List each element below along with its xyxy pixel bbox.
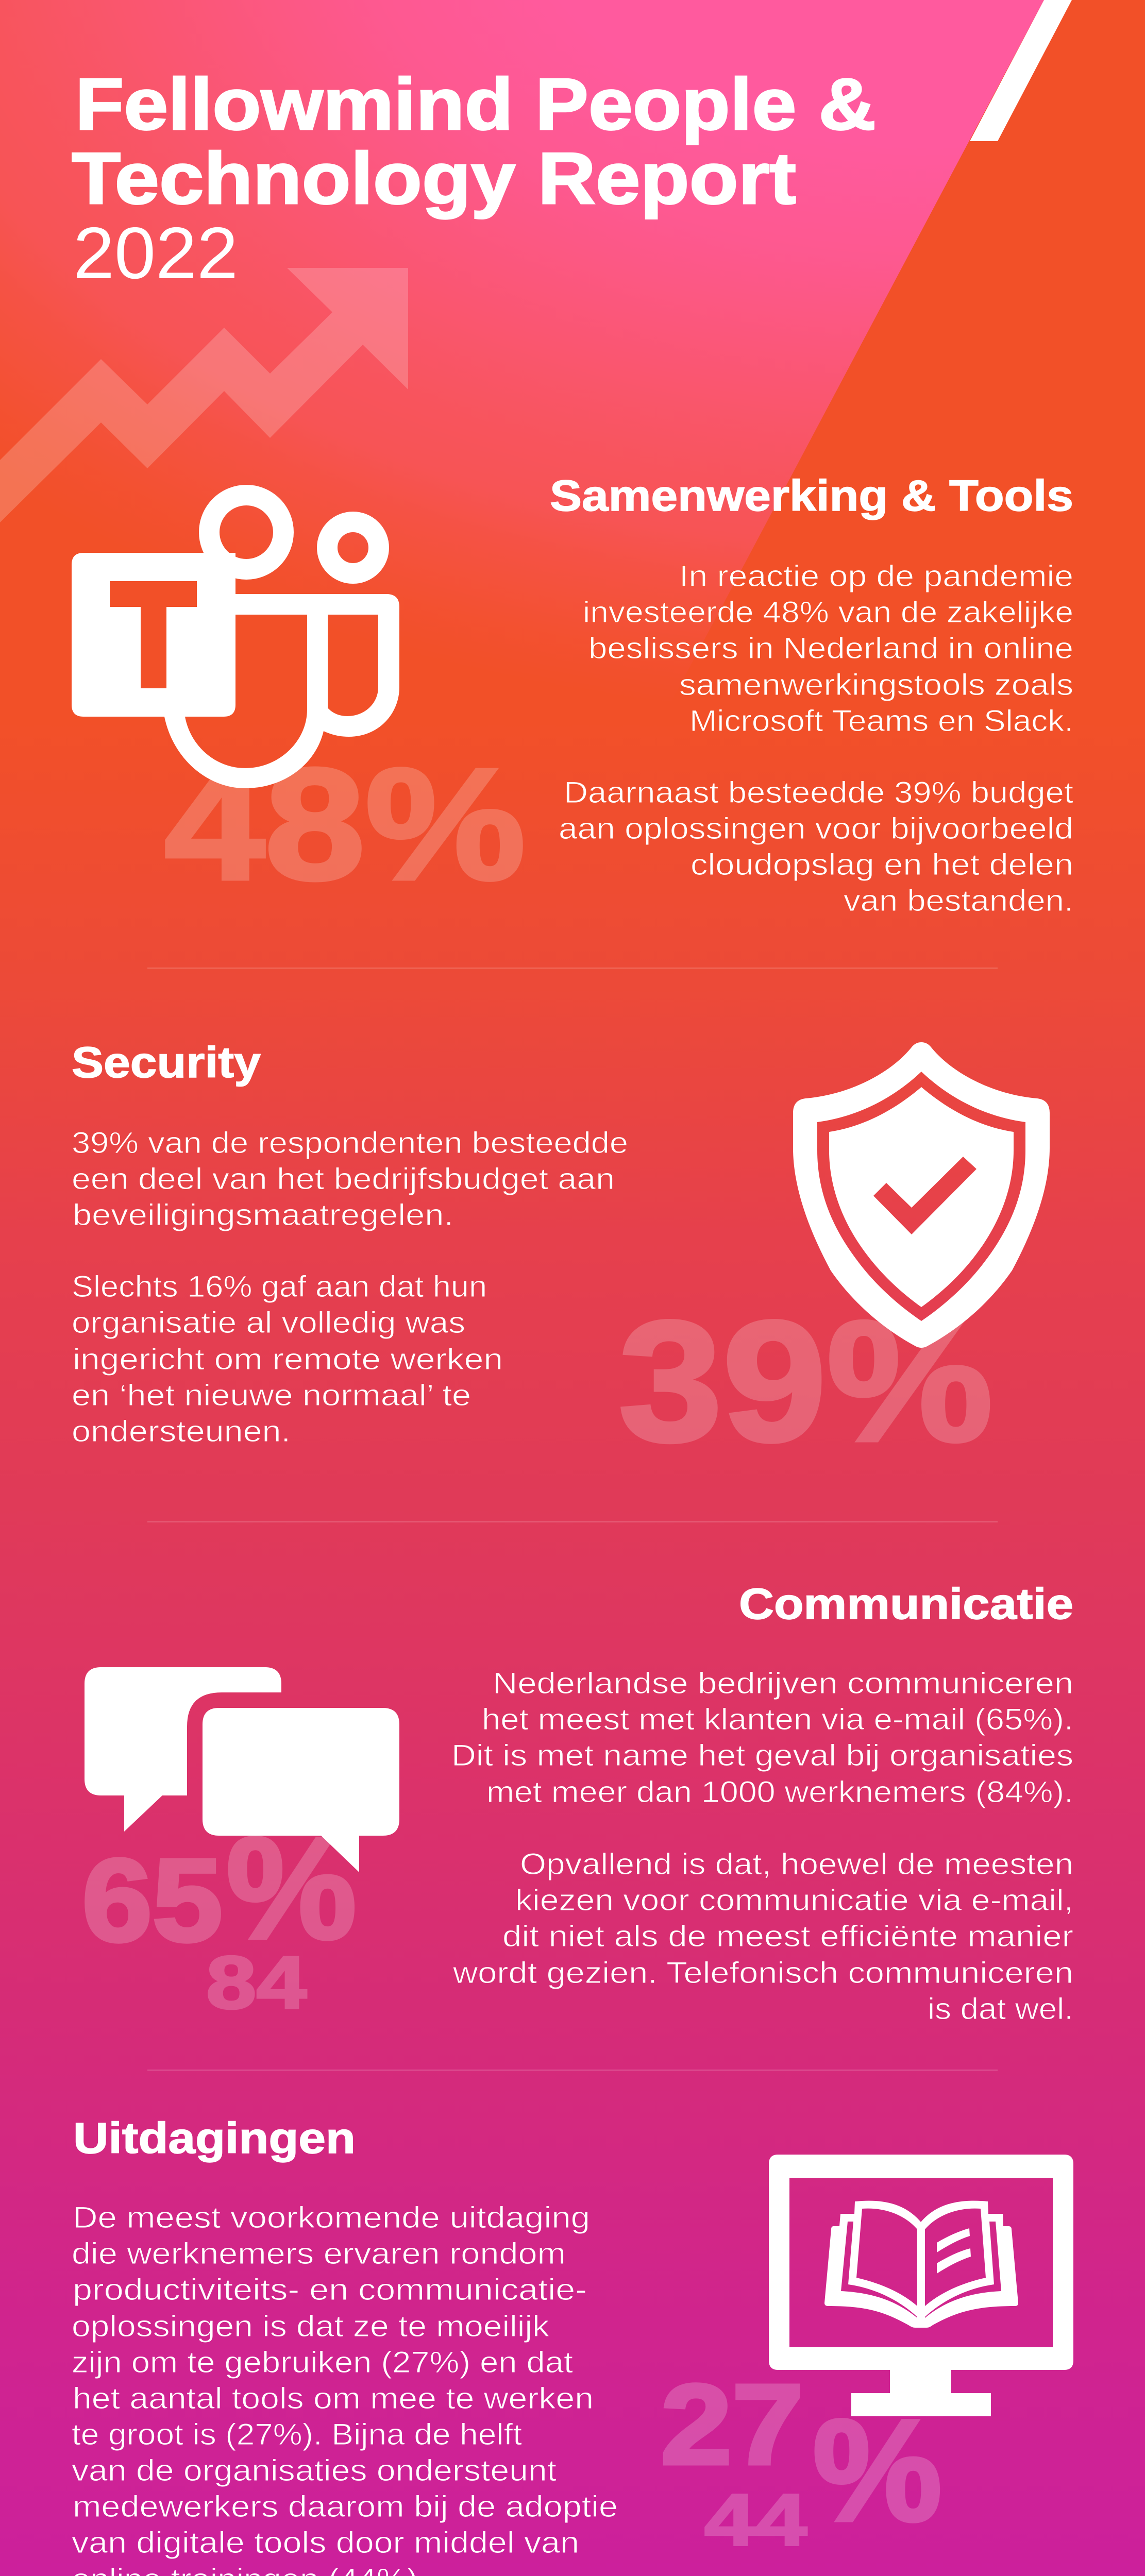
icon: shield with check: [793, 1042, 1050, 1348]
body text: ingericht om remote werken: [73, 1343, 503, 1376]
body text: van de organisaties ondersteunt: [72, 2454, 557, 2487]
body text: aan oplossingen voor bijvoorbeeld: [559, 812, 1073, 845]
body text: van digitale tools door middel van: [72, 2526, 579, 2560]
body text: een deel van het bedrijfsbudget aan: [72, 1162, 615, 1196]
heading: Communicatie: [739, 1580, 1073, 1628]
stat: 65%: 65: [82, 1835, 223, 1966]
stat: 65%: [82, 1807, 357, 1969]
body text: In reactie op de pandemie: [679, 560, 1073, 593]
body text: kiezen voor communicatie via e-mail,: [515, 1884, 1073, 1917]
body text: beveiligingsmaatregelen.: [73, 1198, 453, 1232]
stat: 48%: 48%: [164, 736, 526, 913]
heading: Security: [72, 1038, 261, 1087]
white diagonal stripe: [970, 0, 1072, 141]
icon: rising arrow: [0, 268, 408, 522]
body text: Daarnaast besteedde 39% budget: [564, 776, 1073, 809]
heading: Uitdagingen: [73, 2114, 356, 2162]
body text: medewerkers daarom bij de adoptie: [73, 2490, 618, 2523]
icon: speech bubbles: [85, 1667, 399, 1872]
body text: Microsoft Teams en Slack.: [689, 704, 1073, 738]
icon: Teams logo: [72, 495, 399, 788]
body text: het aantal tools om mee te werken: [73, 2382, 594, 2415]
body text: Slechts 16% gaf aan dat hun: [72, 1270, 487, 1303]
heading: Samenwerking & Tools: [550, 471, 1073, 520]
body text: [451, 1667, 1073, 2026]
panel: Samenwerking & Tools: [72, 471, 1073, 918]
panel: Security: [72, 1038, 1050, 1477]
body text: beslissers in Nederland in online: [588, 632, 1073, 665]
stat: 44: 44: [704, 2479, 807, 2561]
pink header wedge: [0, 0, 1044, 899]
title: [72, 63, 876, 294]
title: 2022: [73, 212, 238, 294]
stat: 27%: 27: [661, 2361, 803, 2488]
body text: te groot is (27%). Bijna de helft: [72, 2418, 522, 2451]
body text: wordt gezien. Telefonisch communiceren: [452, 1956, 1073, 1990]
body text: organisatie al volledig was: [72, 1306, 465, 1340]
body text: Dit is met name het geval bij organisaties: [451, 1739, 1073, 1772]
body text: en ‘het nieuwe normaal’ te: [72, 1379, 471, 1412]
body text: Nederlandse bedrijven communiceren: [493, 1667, 1073, 1700]
body text: met meer dan 1000 werknemers (84%).: [486, 1775, 1073, 1809]
body text: [559, 560, 1073, 918]
body text: die werknemers ervaren rondom: [72, 2237, 566, 2270]
panel: Communicatie: [82, 1580, 1073, 2026]
body text: Opvallend is dat, hoewel de meesten: [520, 1848, 1073, 1881]
body text: productiviteits- en communicatie-: [73, 2273, 587, 2307]
stat: 27%: %: [813, 2389, 942, 2551]
stat: 65%: %: [226, 1807, 357, 1969]
body text: dit niet als de meest efficiënte manier: [502, 1920, 1073, 1953]
panel: Uitdagingen: [72, 2114, 1073, 2576]
stat: 84: 84: [206, 1941, 307, 2024]
body text: het meest met klanten via e-mail (65%).: [482, 1703, 1073, 1736]
icon: monitor with book: [769, 2155, 1073, 2416]
title: Fellowmind People &: [75, 63, 876, 145]
body text: cloudopslag en het delen: [691, 848, 1073, 882]
body text: 39% van de respondenten besteedde: [72, 1126, 628, 1160]
body text: ondersteunen.: [72, 1415, 291, 1448]
body text: De meest voorkomende uitdaging: [73, 2201, 590, 2234]
body text: oplossingen is dat ze te moeilijk: [72, 2310, 550, 2343]
stat: 39%: 39%: [618, 1285, 993, 1477]
body text: [72, 1126, 628, 1448]
body text: investeerde 48% van de zakelijke: [583, 596, 1073, 629]
body text: is dat wel.: [928, 1992, 1073, 2026]
body text: samenwerkingstools zoals: [679, 668, 1073, 702]
body text: zijn om te gebruiken (27%) en dat: [72, 2346, 573, 2379]
title: Technology Report: [72, 138, 796, 219]
body text: van bestanden.: [844, 884, 1073, 918]
stat: 27%: [661, 2361, 942, 2551]
body text: [72, 2201, 618, 2576]
